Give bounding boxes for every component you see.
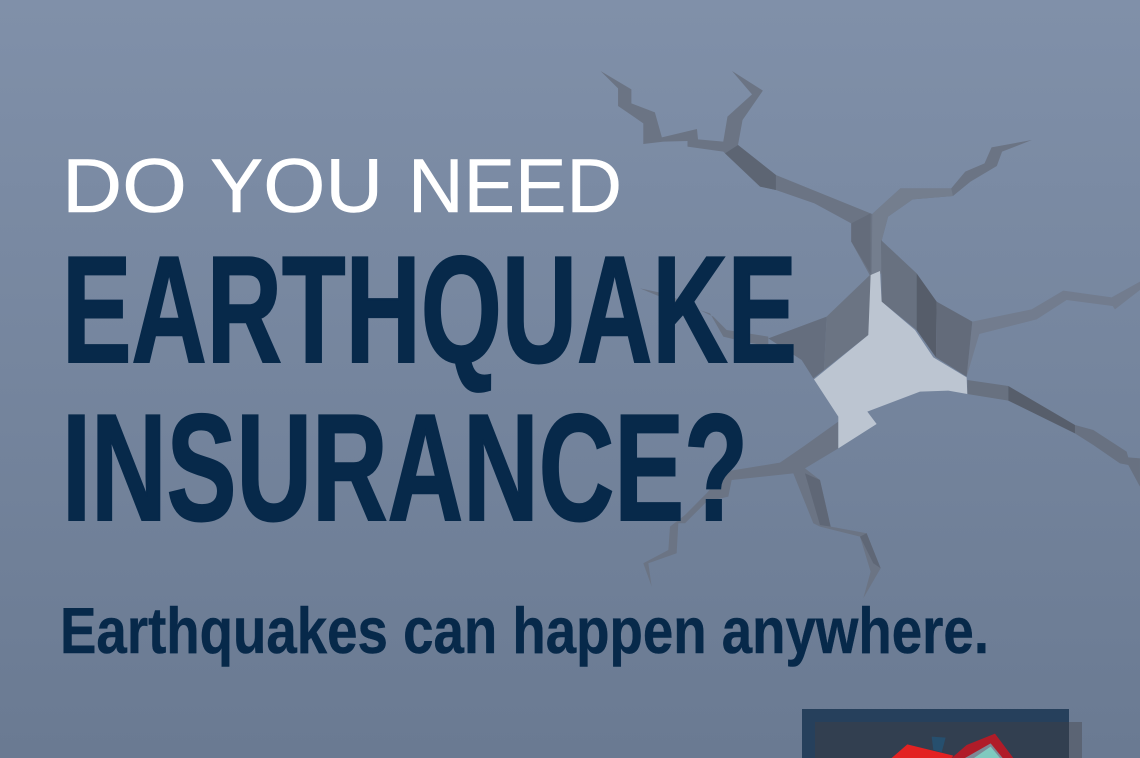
icon: damaged house card (cropped)	[802, 709, 1082, 758]
card frame	[802, 709, 1069, 758]
crack: left wall of hole	[768, 273, 872, 378]
crack: pale hole floor	[814, 271, 967, 448]
crack: left faint branch	[640, 288, 768, 346]
heading: do you need: NEED	[408, 144, 622, 229]
crack: central hole and lower branches	[640, 240, 1140, 598]
heading: do you need: DO	[62, 144, 187, 229]
crack: right upper branch	[967, 282, 1140, 377]
card shadow	[1069, 722, 1082, 758]
crack: upper branches	[601, 71, 1032, 277]
heading: insurance: INSURANCE?	[62, 383, 748, 553]
crack: lower left branch	[643, 422, 881, 598]
heading: do you need: YOU	[210, 144, 383, 229]
house illustration	[892, 734, 1013, 758]
crack: right wall of hole	[881, 240, 972, 377]
illustration: ground crack	[601, 71, 1140, 598]
heading: earthquake: EARTHQUAKE	[62, 225, 797, 395]
heading: do you need	[62, 144, 622, 229]
subheading: Earthquakes can happen anywhere.	[60, 594, 989, 667]
crack: right lower branch	[967, 380, 1140, 487]
card inner panel	[815, 722, 1069, 758]
